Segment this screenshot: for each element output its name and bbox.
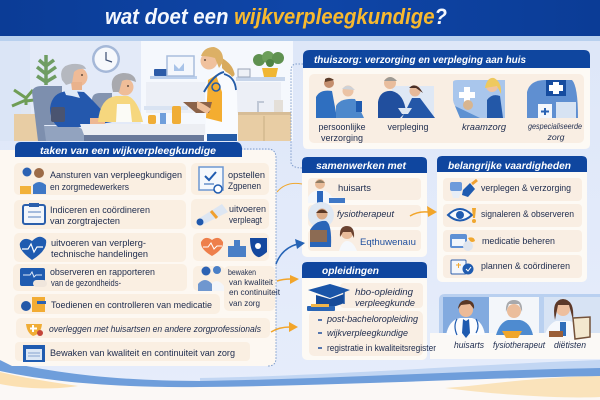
icon: care colleague [339,226,357,251]
text: hbo-opleiding: hbo-opleiding [355,287,414,298]
text: gespecialiseerde zorg: zorg [546,132,565,142]
person: fysiotherapeut [496,300,533,338]
text: uitvoeren handelingen [51,238,148,260]
text: aansturen: Aansturen van verpleegkundigen [50,170,182,181]
text: uitvoeren verpleagt [229,204,266,226]
text: bewaken: Bewaken van kwaliteit en continuiteit van zorg [50,348,235,359]
text: gespecialiseerde zorg [528,121,582,142]
kitchen cabinet [238,100,291,141]
panel: opleidingen [302,262,436,360]
text: aansturen: en zorgmedewerkers [50,182,129,193]
header banner [0,0,600,41]
clock [92,45,120,73]
text: hbo-opleiding: verpleegkunde [355,298,415,309]
heading: samenwerken met [316,160,406,172]
person: huisarts [446,300,485,338]
older woman [98,73,143,122]
icon: report [23,345,45,362]
text: bewaken kwaliteit: en continuiteit [229,287,281,297]
text: bewaken kwaliteit: van zorg [229,298,260,308]
label: diëtisten: diëtisten [554,340,586,351]
panel: taken van een wijkverpleegkundige [0,142,281,366]
icon: maternity care [453,78,505,118]
row backgrounds [13,163,275,361]
text: signaleren en observeren: signaleren & observeren [481,209,574,220]
list: further training [318,314,436,353]
text: opstellen: Zgpenen [228,181,261,192]
text: persoonlijke verzorging [318,122,366,144]
table [80,124,205,141]
label: fysiotherapeut: fysiotherapeut [493,340,545,351]
icon: medication [21,297,46,312]
text: hbo-opleiding [355,287,415,309]
nurse [183,47,238,141]
text: verplegen en verzorging: verplegen & verzorging [481,183,571,194]
heading: taken van een wijkverpleegkundige [40,145,216,157]
text: uitvoeren verpleagt: verpleagt [229,215,262,226]
arrow: blue to samenwerken [276,239,305,264]
text: opstellen: opstellen [228,170,265,181]
text: overleggen: overleggen met huisartsen en andere zorgprofessionals [49,324,261,335]
text: indiceren: Indiceren en coördineren [50,205,150,216]
text: medicatie beheren: medicatie beheren [482,236,555,247]
text: uitvoeren handelingen: technische handelingen [51,249,148,260]
icon: medication calendar [450,234,475,251]
label: huisarts: huisarts [454,340,484,351]
text: uitvoeren handelingen: uitvoeren van verplerg- [51,238,146,249]
left cabinet [14,114,40,141]
icon: monitor [20,268,47,287]
text: uitvoeren verpleagt: uitvoeren [229,204,266,215]
icon: planner [451,260,474,274]
heading: thuiszorg: verzorging en verpleging aan huis [314,54,526,66]
text: aansturen [50,170,182,193]
title: wat doet een wijkverpleegkundige? [105,4,447,29]
arrow: orange to vaardigheden [410,206,437,217]
icon: care professionals [198,266,224,291]
person: diëtisten [544,299,590,339]
armchair [32,86,87,141]
older man [50,64,112,127]
text: verpleging: verpleging [388,122,428,133]
text: opstellen [228,170,265,192]
icon: heart with bricks and shield [201,238,267,257]
text: persoonlijke verzorging: verzorging [321,133,363,144]
panel: samenwerken met [302,157,427,257]
heading: belangrijke vaardigheden [448,160,571,172]
text: huisarts: huisarts [338,183,371,194]
left shelf with picture [150,56,197,79]
text: bewaken kwaliteit: van kwaliteit [229,277,274,287]
heading [303,50,590,68]
icon: personal care [316,78,364,118]
icon: specialised care [527,80,578,118]
arrow: orange to opleidingen [277,275,299,284]
icon: team members [20,168,46,194]
text: bewaken kwaliteit: bewaken [228,267,256,277]
heading: opleidingen [322,265,379,277]
text: persoonlijke verzorging: persoonlijke [318,122,366,133]
heading [437,156,587,172]
text: Eqthuwenaıu: Eqthuwenaıu [360,237,416,248]
icon: care tools [450,180,477,198]
icon: clipboard [23,203,45,224]
text: observeren: observeren en rapporteren [50,267,155,278]
panel: zorgprofessionals [430,294,600,359]
text: plannen en coördineren: plannen & coördineren [481,261,570,272]
list: further training: post-bacheloropleiding [326,314,419,325]
text: bewaken kwaliteit [228,267,281,308]
text: observeren: van de gezondheids- [51,278,121,289]
chair woman [92,93,112,122]
panel: thuiszorg [303,50,590,149]
bottom wave with sand [0,360,600,400]
icon: shield with cross [26,324,43,336]
right shelf with plant [236,51,285,81]
icon: nursing [378,77,435,118]
icon: graduation cap [307,284,350,311]
dotted connector lines [291,64,303,168]
tall plant [37,55,56,85]
list: further training: wijkverpleegkundige [327,328,408,339]
icon: bandage [196,204,228,226]
arrow: orange to post-bachelor [271,322,298,332]
illustration: home care scene [0,41,293,141]
text: kraamzorg: kraamzorg [462,122,507,133]
small plant [12,90,34,114]
text: gespecialiseerde zorg: gespecialiseerde [528,121,582,131]
arrow: orange arc to samenwerken [277,183,302,192]
text: fysiotherapeut: fysiotherapeut [337,209,394,220]
icon: general practitioner [308,179,345,203]
text: observeren [50,267,155,289]
panel: belangrijke vaardigheden [437,156,587,282]
text: toedienen: Toedienen en controlleren van medicatie [51,300,212,311]
text: indiceren: van zorgtrajecten [50,216,120,227]
icon: checklist [199,167,223,193]
icon: heart pulse [20,237,46,260]
text: indiceren [50,205,150,227]
small counter with bottles [144,106,188,124]
icon: eye with warning [448,208,476,223]
heading [15,142,242,157]
icon: physiotherapist [308,202,334,247]
list: further training: registratie in kwaliteitsregister [327,343,436,353]
back splash tiles [146,82,281,113]
